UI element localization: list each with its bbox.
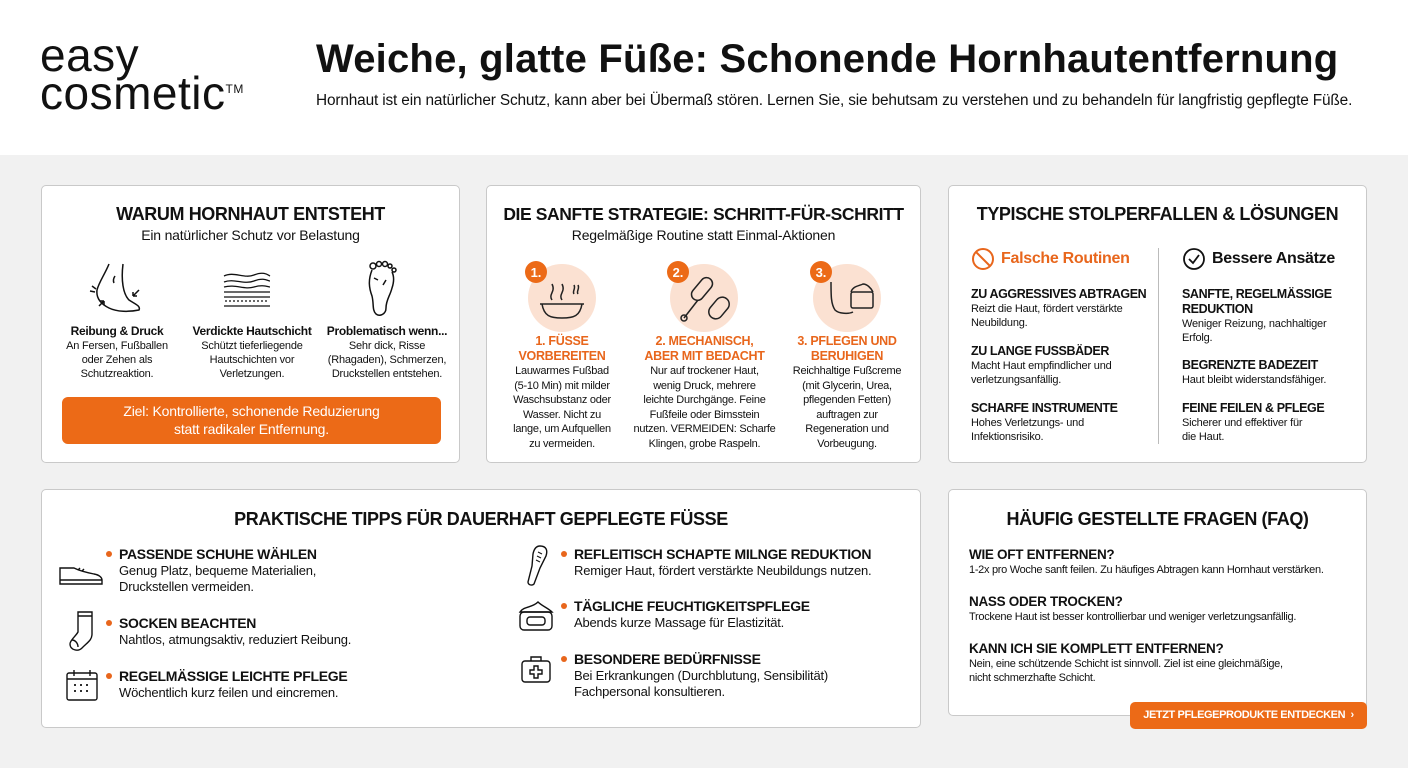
- icon: file: [527, 545, 548, 586]
- step 3 text: pflegenden Fetten): [803, 394, 891, 406]
- panel: stolperfallen: Haut bleibt widerstandsfähiger.: [1182, 374, 1326, 386]
- panel: stolperfallen: BEGRENZTE BADEZEIT: [1182, 358, 1318, 372]
- faq 2: NASS ODER TROCKEN?: [969, 594, 1123, 609]
- icon: cream jar: [518, 601, 554, 631]
- step 2 text: [633, 334, 776, 450]
- tip 4: REFLEITISCH SCHAPTE MILNGE REDUKTION: [574, 546, 871, 562]
- icon: sock: [69, 611, 93, 651]
- callout: ziel: statt radikaler Entfernung.: [174, 421, 329, 437]
- step 3 text: BERUHIGEN: [811, 349, 883, 363]
- tip 2: Nahtlos, atmungsaktiv, reduziert Reibung.: [119, 632, 351, 647]
- tip 5: TÄGLICHE FEUCHTIGKEITSPFLEGE: [574, 598, 810, 614]
- callout: ziel: Ziel: Kontrollierte, schonende Reduzierung: [123, 403, 380, 419]
- text: verdickte: Schützt tieferliegende: [201, 340, 303, 352]
- step 1 text: VORBEREITEN: [518, 349, 606, 363]
- list: bessere: [1182, 287, 1332, 344]
- column heading: bessere ansaetze: [1183, 248, 1335, 270]
- icon: calendar: [66, 670, 98, 701]
- icon: skin layers: [224, 272, 270, 307]
- faq 2: Trockene Haut ist besser kontrollierbar und weniger verletzungsanfällig.: [969, 611, 1296, 623]
- panel: stolperfallen: Sicherer und effektiver für: [1182, 417, 1302, 429]
- faq 1: 1-2x pro Woche sanft feilen. Zu häufiges Abtragen kann Hornhaut verstärken.: [969, 564, 1324, 576]
- tip 6: BESONDERE BEDÜRFNISSE: [574, 651, 761, 667]
- text: problematisch: Sehr dick, Risse: [349, 340, 425, 352]
- step 2 text: wenig Druck, mehrere: [653, 380, 756, 392]
- button: cta: JETZT PFLEGEPRODUKTE ENTDECKEN ›: [1143, 709, 1354, 721]
- column heading: bessere ansaetze: Bessere Ansätze: [1212, 250, 1335, 267]
- tip 1: Druckstellen vermeiden.: [119, 579, 254, 594]
- icon: foot pressure: [90, 264, 140, 312]
- list: falsche: Neubildung.: [971, 317, 1028, 329]
- icon: first aid: [521, 656, 551, 683]
- faq 3: nicht schmerzhafte Schicht.: [969, 672, 1095, 684]
- step 1 text: Lauwarmes Fußbad: [515, 365, 609, 377]
- faq 2: [969, 594, 1296, 623]
- logo: [40, 29, 244, 119]
- panel: stolperfallen: Infektionsrisiko.: [971, 431, 1043, 443]
- logo: easy: [40, 29, 139, 81]
- text: verdickte: Hautschichten vor: [210, 354, 294, 366]
- panel: praktische tipps: [41, 489, 921, 728]
- panel: stolperfallen: die Haut.: [1182, 431, 1224, 443]
- panel: stolperfallen: Hohes Verletzungs- und: [971, 417, 1084, 429]
- subtitle: Hornhaut ist ein natürlicher Schutz, kann aber bei Übermaß stören. Lernen Sie, sie behutsam zu verstehen und zu behandeln für langfristig gepflegte Füße.: [316, 92, 1352, 109]
- step 1 text: lange, um Aufquellen: [513, 423, 611, 435]
- icon: step 3 cream: 3.: [816, 265, 826, 280]
- button: cta: [1130, 702, 1367, 729]
- text: verdickte: [192, 324, 312, 380]
- faq 3: Nein, eine schützende Schicht ist sinnvoll. Ziel ist eine gleichmäßige,: [969, 658, 1283, 670]
- icon: step 2 file: [667, 261, 738, 332]
- icon: step 2 file: 2.: [673, 265, 683, 280]
- panel: sanfte strategie: [486, 185, 921, 463]
- panel: sanfte strategie: Regelmäßige Routine statt Einmal-Aktionen: [572, 227, 835, 243]
- heading: WARUM HORNHAUT ENTSTEHT: [116, 204, 385, 224]
- text: problematisch: Problematisch wenn...: [327, 324, 447, 338]
- text: problematisch: (Rhagaden), Schmerzen,: [328, 354, 446, 366]
- list: falsche: [971, 287, 1146, 329]
- column heading: falsche routinen: [972, 248, 1130, 270]
- step 1 text: Waschsubstanz oder: [513, 394, 611, 406]
- logo: cosmeticTM: [40, 67, 244, 119]
- step 2 text: Klingen, grobe Raspeln.: [649, 438, 760, 450]
- list: falsche: Reizt die Haut, fördert verstärkte: [971, 303, 1123, 315]
- tip 3: [106, 668, 348, 700]
- tip 4: Remiger Haut, fördert verstärkte Neubildungs nutzen.: [574, 563, 871, 578]
- step 2 text: Fußfeile oder Bimsstein: [650, 408, 759, 420]
- heading: HÄUFIG GESTELLTE FRAGEN (FAQ): [1006, 509, 1309, 529]
- panel: stolperfallen: SCHARFE INSTRUMENTE: [971, 401, 1118, 415]
- icon: step 1 bowl: [525, 261, 596, 332]
- step 2 text: Nur auf trockener Haut,: [650, 365, 759, 377]
- step 3 text: auftragen zur: [816, 408, 878, 420]
- text: reibung: oder Zehen als: [82, 354, 152, 366]
- step 2 text: 2. MECHANISCH,: [656, 334, 753, 348]
- step 3 text: (mit Glycerin, Urea,: [802, 380, 892, 392]
- step 2 text: nutzen. VERMEIDEN: Scharfe: [633, 423, 776, 435]
- panel: warum hornhaut entsteht: [41, 185, 460, 463]
- heading: DIE SANFTE STRATEGIE: SCHRITT-FÜR-SCHRITT: [503, 204, 904, 224]
- list: bessere: Erfolg.: [1182, 332, 1212, 344]
- list: bessere: Weniger Reizung, nachhaltiger: [1182, 318, 1326, 330]
- icon: step 1 bowl: 1.: [531, 265, 541, 280]
- tip 6: [561, 651, 828, 699]
- panel: stolperfallen: [948, 185, 1367, 463]
- step 3 text: Reichhaltige Fußcreme: [793, 365, 901, 377]
- heading: TYPISCHE STOLPERFALLEN & LÖSUNGEN: [977, 204, 1338, 224]
- faq 1: WIE OFT ENTFERNEN?: [969, 547, 1114, 562]
- text: verdickte: Verletzungen.: [220, 368, 284, 380]
- panel: warum hornhaut entsteht: Ein natürlicher Schutz vor Belastung: [141, 227, 360, 243]
- text: reibung: Schutzreaktion.: [81, 368, 153, 380]
- callout: ziel: [62, 397, 441, 444]
- list: bessere: SANFTE, REGELMÄSSIGE: [1182, 287, 1332, 301]
- tip 1: PASSENDE SCHUHE WÄHLEN: [119, 546, 317, 562]
- tip 5: [561, 598, 810, 630]
- column heading: falsche routinen: Falsche Routinen: [1001, 250, 1130, 267]
- tip 4: [561, 546, 871, 578]
- faq 3: [969, 641, 1283, 684]
- step 1 text: zu vermeiden.: [529, 438, 595, 450]
- title: Weiche, glatte Füße: Schonende Hornhautentfernung: [316, 37, 1338, 81]
- step 3 text: [793, 334, 901, 450]
- text: problematisch: [327, 324, 447, 380]
- header band: [0, 0, 1408, 155]
- text: reibung: Reibung & Druck: [71, 324, 163, 338]
- tip 6: Fachpersonal konsultieren.: [574, 684, 725, 699]
- step 3 text: 3. PFLEGEN UND: [797, 334, 897, 348]
- tip 1: [106, 546, 317, 594]
- step 1 text: [513, 334, 611, 450]
- list: bessere: REDUKTION: [1182, 302, 1253, 316]
- step 1 text: Wasser. Nicht zu: [523, 408, 601, 420]
- text: reibung: [66, 324, 168, 380]
- text: problematisch: Druckstellen entstehen.: [332, 368, 442, 380]
- step 1 text: 1. FÜSSE: [535, 334, 589, 348]
- tip 2: SOCKEN BEACHTEN: [119, 615, 256, 631]
- faq 1: [969, 547, 1324, 576]
- tip 2: [106, 615, 351, 647]
- panel: stolperfallen: verletzungsanfällig.: [971, 374, 1061, 386]
- step 3 text: Vorbeugung.: [817, 438, 877, 450]
- panel: faq: [948, 489, 1367, 716]
- text: reibung: An Fersen, Fußballen: [66, 340, 168, 352]
- icon: step 3 cream: [810, 261, 881, 332]
- icon: foot sole: [368, 260, 397, 316]
- panel: stolperfallen: ZU LANGE FUSSBÄDER: [971, 344, 1109, 358]
- step 2 text: ABER MIT BEDACHT: [644, 349, 765, 363]
- step 1 text: (5-10 Min) mit milder: [514, 380, 610, 392]
- step 3 text: Regeneration und: [805, 423, 889, 435]
- tip 6: Bei Erkrankungen (Durchblutung, Sensibilität): [574, 668, 828, 683]
- icon: shoe: [59, 567, 103, 585]
- panel: stolperfallen: Macht Haut empfindlicher und: [971, 360, 1112, 372]
- tip 3: Wöchentlich kurz feilen und eincremen.: [119, 685, 338, 700]
- step 2 text: leichte Durchgänge. Feine: [643, 394, 766, 406]
- list: falsche: ZU AGGRESSIVES ABTRAGEN: [971, 287, 1146, 301]
- tip 5: Abends kurze Massage für Elastizität.: [574, 615, 784, 630]
- faq 3: KANN ICH SIE KOMPLETT ENTFERNEN?: [969, 641, 1223, 656]
- tip 1: Genug Platz, bequeme Materialien,: [119, 563, 316, 578]
- text: verdickte: Verdickte Hautschicht: [192, 324, 312, 338]
- tip 3: REGELMÄSSIGE LEICHTE PFLEGE: [119, 668, 347, 684]
- heading: PRAKTISCHE TIPPS FÜR DAUERHAFT GEPFLEGTE FÜSSE: [234, 509, 728, 529]
- panel: stolperfallen: FEINE FEILEN & PFLEGE: [1182, 401, 1324, 415]
